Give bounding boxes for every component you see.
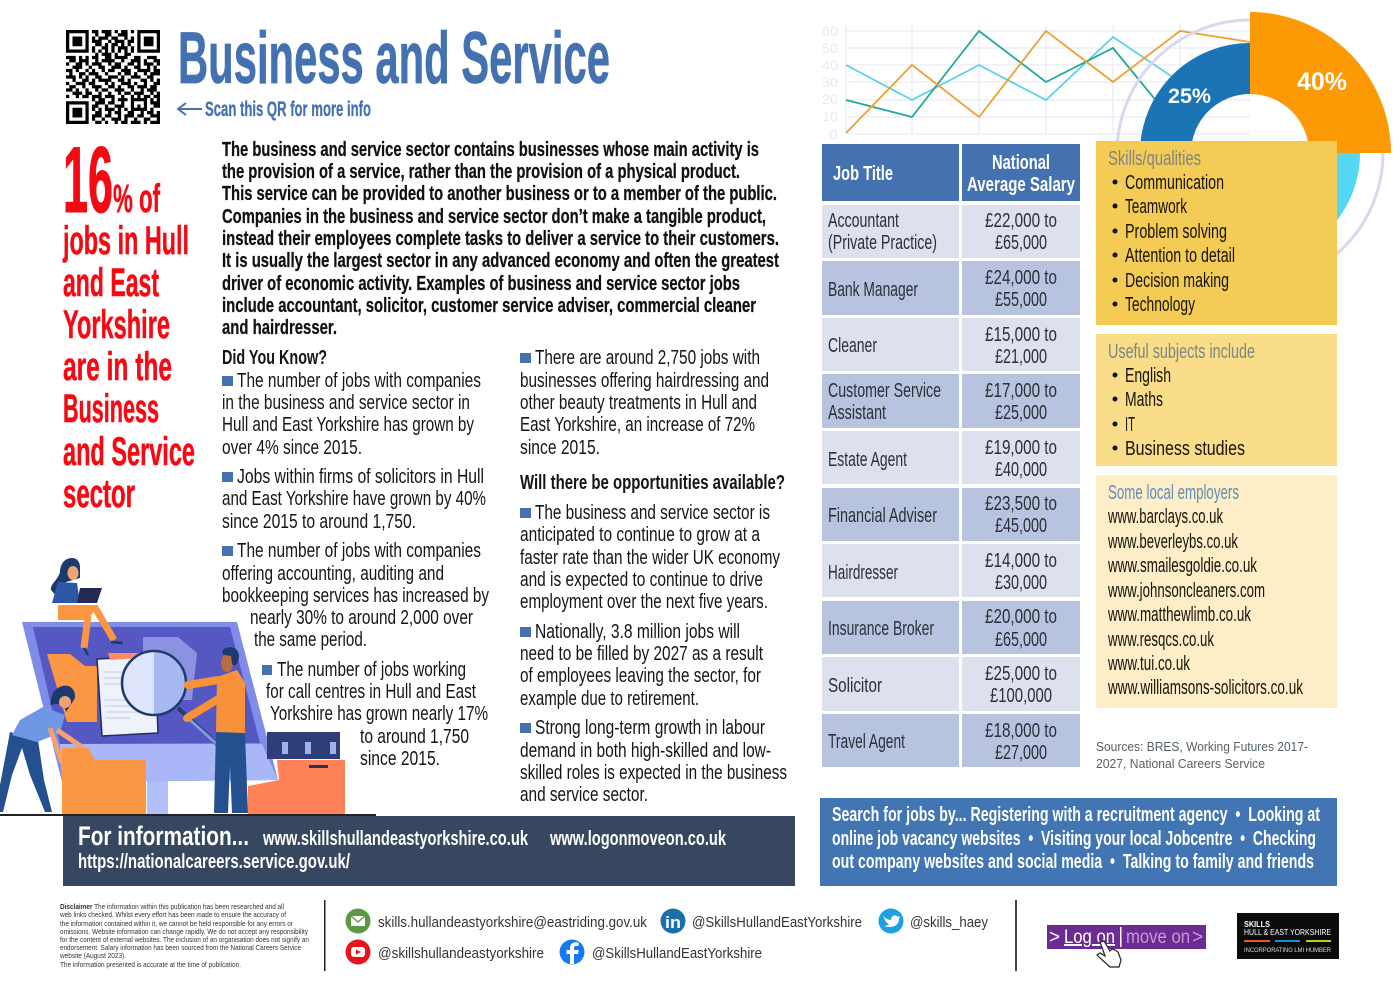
headline statistic: and Service [63,430,195,474]
intro paragraph: Companies in the business and service sector don’t make a tangible product, [222,206,766,228]
information bar: www.logonmoveon.co.uk [549,828,727,850]
disclaimer [59,902,309,969]
intro paragraph: instead their employees complete tasks to deliver a service to their customers. [222,228,779,250]
sources note: 2027, National Careers Service [1096,756,1265,771]
did you know column: Jobs within firms of solicitors in Hull [237,466,484,488]
panel: skills and qualities: Skills/qualities [1108,148,1201,170]
headline statistic: are in the [63,345,172,389]
contact: twitter [878,908,988,934]
contact: linkedin: in [665,913,681,932]
panel: local employers [1096,475,1337,708]
row: accountant: (Private Practice) [828,232,937,254]
intro paragraph: It is usually the largest sector in any advanced economy and often the greatest [222,250,779,272]
did you know column: since 2015. [360,748,440,770]
did you know column: bookkeeping services has increased by [222,585,489,607]
row: customer service assistant: Assistant [828,402,886,424]
contact: email: skills.hullandeastyorkshire@eastriding.gov.uk [378,914,647,931]
row: hairdresser [822,544,1080,597]
job search box [820,798,1337,886]
information bar: https://nationalcareers.service.gov.uk/ [78,851,350,873]
row: customer service assistant: £17,000 to [985,380,1057,402]
intro paragraph: This service can be provided to another business or to a member of the public. [222,183,777,205]
disclaimer: web links checked. Whilst every effort has been made to ensure the accuracy of [59,910,286,919]
intro paragraph: The business and service sector contains businesses whose main activity is [222,139,759,161]
row: insurance broker [822,601,1080,654]
row: financial adviser: Financial Adviser [828,505,937,527]
disclaimer: The information presented is accurate at the time of publication. [60,960,241,969]
line chart: 0 [829,126,838,142]
right text column: of employees leaving the sector, for [520,665,761,687]
panel: local employers: www.johnsoncleaners.com [1107,580,1265,602]
headline statistic: and East [63,261,159,305]
right text column: employment over the next five years. [520,591,768,613]
panel: local employers: www.smailesgoldie.co.uk [1107,555,1258,577]
intro paragraph [222,139,779,339]
row: cleaner [822,318,1080,371]
did you know column: offering accounting, auditing and [222,563,444,585]
row: cleaner: £15,000 to [985,324,1057,346]
intro paragraph: include accountant, solicitor, customer service adviser, commercial cleaner [222,295,756,317]
row: insurance broker: £20,000 to [985,606,1057,628]
row: customer service assistant: Customer Service [828,380,941,402]
row: insurance broker: £65,000 [995,629,1047,651]
did you know column: the same period. [254,629,367,651]
QR code [66,30,160,124]
right text column: East Yorkshire, an increase of 72% [520,414,755,436]
row: solicitor: £25,000 to [985,663,1057,685]
document [97,653,158,736]
intro paragraph: and hairdresser. [222,317,337,339]
row: financial adviser: £23,500 to [985,493,1057,515]
logo: log on move on: > [1192,927,1203,948]
QR caption with arrow: Scan this QR for more info [205,98,371,121]
front folder [62,748,146,815]
row: accountant: £22,000 to [985,210,1057,232]
logo: log on move on [1047,925,1206,967]
row: insurance broker: Insurance Broker [828,618,934,640]
person with laptop [51,558,123,655]
panel: skills and qualities: Decision making [1125,270,1229,292]
panel: skills and qualities: Teamwork [1125,196,1188,218]
right text column: demand in both high-skilled and low- [520,740,771,762]
row: cleaner: Cleaner [828,335,877,357]
disclaimer: endorsement. Salary information has been sourced from the National Careers Service [60,943,301,952]
row: customer service assistant: £25,000 [995,402,1047,424]
headline statistic: jobs in Hull [62,219,189,263]
contact: youtube: @skillshullandeastyorkshire [378,945,544,962]
panel: skills and qualities: Attention to detail [1125,245,1235,267]
row: travel agent: Travel Agent [828,731,905,753]
headline statistic: % of [113,177,160,221]
row: accountant: Accountant [828,210,899,232]
headline statistic: Business [63,387,159,431]
row: financial adviser: £45,000 [995,515,1047,537]
logo: log on move on: > [1049,927,1060,948]
panel: local employers: www.matthewlimb.co.uk [1107,604,1252,626]
did you know column: The number of jobs with companies [237,370,481,392]
disclaimer: the information contained within it, we cannot be held responsible for any errors or [60,919,294,928]
right text column: and is expected to continue to drive [520,569,763,591]
row: estate agent: Estate Agent [828,449,907,471]
logo: log on move on: Log on [1064,927,1115,948]
right text column: skilled roles is expected in the business [520,762,787,784]
row: estate agent [822,431,1080,484]
did you know column: since 2015 to around 1,750. [222,511,416,533]
row: solicitor: Solicitor [828,675,882,697]
sources note [1096,739,1308,771]
panel: local employers: www.barclays.co.uk [1107,506,1224,528]
panel: useful subjects: English [1125,365,1171,387]
contact: facebook: @SkillsHullandEastYorkshire [592,945,762,962]
illustration: people searching a computer screen [0,558,345,815]
row: travel agent [822,714,1080,767]
row: accountant [822,205,1080,258]
row: bank manager: £24,000 to [985,267,1057,289]
disclaimer: for the content of external websites. The inclusion of an organisation does not signify an [60,935,309,944]
panel: useful subjects: IT [1125,414,1135,436]
QR caption with arrow [178,98,371,121]
row: hairdresser: £30,000 [995,572,1047,594]
monitor [22,622,278,815]
row: hairdresser: Hairdresser [828,562,898,584]
line chart: 40 [822,57,838,73]
contact: twitter: @skills_haey [910,914,988,931]
line chart: 60 [822,23,838,39]
right text column: faster rate than the wider UK economy [520,547,780,569]
right text column: The business and service sector is [535,502,770,524]
disclaimer: website (August 2023). [59,951,126,960]
person with magnifier [187,647,248,813]
headline statistic: Yorkshire [63,303,170,347]
headline statistic: 16 [63,127,113,232]
right text column: There are around 2,750 jobs with [535,347,760,369]
line chart [822,23,1250,142]
logo: skills hull and east yorkshire: INCORPORATING LMI HUMBER [1244,947,1331,954]
magnifying glass [122,651,220,747]
right text column: and service sector. [520,784,648,806]
panel: skills and qualities [1096,141,1337,325]
did you know column [222,347,489,770]
contact: facebook [560,940,762,964]
donut chart: 25% [1168,85,1211,108]
intro paragraph: driver of economic activity. Examples of business and service sector jobs [222,273,740,295]
intro paragraph: the provision of a service, rather than the provision of a physical product. [222,161,740,183]
row: customer service assistant [822,374,1080,428]
headline statistic: sector [63,472,135,516]
right text column: other beauty treatments in Hull and [520,392,757,414]
title: Business and Service [178,18,610,99]
row: travel agent: £18,000 to [985,720,1057,742]
right text column [520,347,787,806]
disclaimer: Disclaimer The information within this publication has been researched and all [60,902,284,911]
panel: useful subjects [1096,334,1337,466]
contact: youtube [346,940,544,964]
donut chart [1117,12,1391,286]
right text column: Will there be opportunities available? [520,472,785,494]
right text column: since 2015. [520,437,600,459]
contact: linkedin: @SkillsHullandEastYorkshire [692,914,862,931]
table header: Job Title [833,163,893,185]
row: hairdresser: £14,000 to [985,550,1057,572]
donut chart: 40% [1297,68,1347,96]
row: financial adviser [822,488,1080,541]
panel: local employers: www.resqcs.co.uk [1107,629,1215,651]
row: accountant: £65,000 [995,232,1047,254]
logo: skills hull and east yorkshire: HULL & EAST YORKSHIRE [1244,928,1331,937]
row: bank manager [822,261,1080,315]
disclaimer: omissions. Website information can change rapidly. We do not accept any responsibility [60,927,308,936]
panel: useful subjects: Maths [1125,389,1163,411]
logo: log on move on: move on [1126,927,1190,948]
did you know column: in the business and service sector in [222,392,470,414]
headline statistic [62,127,195,516]
panel: useful subjects: Useful subjects include [1108,341,1255,363]
line chart: 10 [822,108,838,124]
did you know column: The number of jobs working [277,659,466,681]
binders and box [248,732,345,815]
table header: National [992,152,1050,174]
right text column: anticipated to continue to grow at a [520,524,761,546]
panel: skills and qualities: Communication [1125,172,1224,194]
row: solicitor [822,657,1080,711]
did you know column: Hull and East Yorkshire has grown by [222,414,474,436]
line chart: 30 [822,74,838,90]
did you know column: and East Yorkshire have grown by 40% [222,488,486,510]
row: estate agent: £19,000 to [985,437,1057,459]
panel: local employers: www.beverleybs.co.uk [1107,531,1239,553]
row: bank manager: Bank Manager [828,279,918,301]
row: solicitor: £100,000 [990,685,1052,707]
contact: linkedin [660,908,862,934]
right text column: Nationally, 3.8 million jobs will [535,621,740,643]
right text column: example due to retirement. [520,688,699,710]
panel: useful subjects: Business studies [1125,438,1245,460]
table header: Average Salary [967,174,1076,196]
salary table [822,144,1080,767]
line chart: 50 [822,40,838,56]
right text column: businesses offering hairdressing and [520,370,769,392]
right text column: need to be filled by 2027 as a result [520,643,763,665]
contact: email [346,908,647,934]
person with folder [0,686,82,812]
logo: skills hull and east yorkshire [1237,913,1339,959]
panel: local employers: www.tui.co.uk [1107,653,1191,675]
sources note: Sources: BRES, Working Futures 2017- [1096,739,1308,754]
did you know column: Yorkshire has grown nearly 17% [270,703,488,725]
row: cleaner: £21,000 [995,346,1047,368]
folder on screen [47,654,97,722]
did you know column: for call centres in Hull and East [266,681,476,703]
information bar: For information... [78,821,249,851]
right text column: Strong long-term growth in labour [535,717,765,739]
table header [822,144,1080,201]
did you know column: The number of jobs with companies [237,540,481,562]
panel: local employers: Some local employers [1108,482,1239,504]
information bar: www.skillshullandeastyorkshire.co.uk [262,828,529,850]
information bar [0,814,795,886]
did you know column: to around 1,750 [360,726,469,748]
did you know column: Did You Know? [222,347,327,369]
panel: local employers: www.williamsons-solicitors.co.uk [1107,677,1304,699]
did you know column: nearly 30% to around 2,000 over [250,607,473,629]
row: bank manager: £55,000 [995,289,1047,311]
panel: skills and qualities: Problem solving [1125,221,1227,243]
panel: skills and qualities: Technology [1125,294,1195,316]
logo: skills hull and east yorkshire: SKILLS [1244,920,1271,929]
did you know column: over 4% since 2015. [222,437,362,459]
line chart: 20 [822,91,838,107]
row: estate agent: £40,000 [995,459,1047,481]
row: travel agent: £27,000 [995,742,1047,764]
